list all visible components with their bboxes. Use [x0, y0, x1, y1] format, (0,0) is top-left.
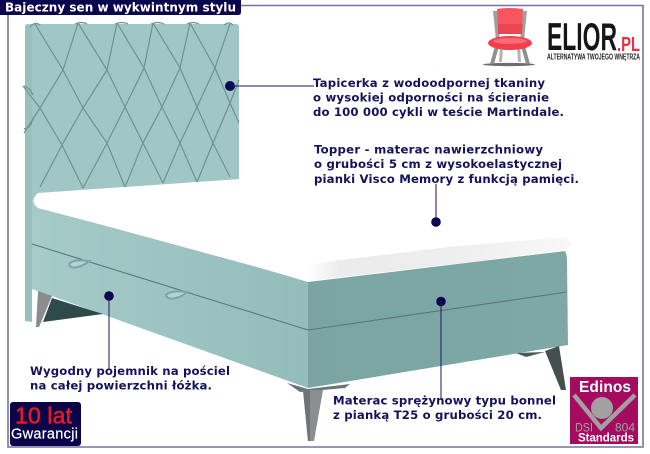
title bar: Bajeczny sen w wykwintnym stylu [5, 0, 236, 14]
logo wordmark: .PL [617, 34, 640, 56]
badge: Edinos standards: Standards [578, 432, 634, 444]
badge: Edinos standards [570, 377, 638, 444]
headboard [23, 22, 239, 322]
callout: upholstery: Tapicerka z wodoodpornej tkaniny [313, 76, 545, 90]
storage handles [69, 260, 187, 299]
box base [32, 200, 568, 388]
base seam [32, 244, 567, 330]
badge: 10 lat warranty: Gwarancji [11, 426, 78, 442]
front centre leg [287, 383, 350, 441]
callout: mattress [333, 297, 556, 422]
badge: 10 lat warranty [10, 402, 81, 446]
callout: upholstery: o wysokiej odporności na ścieranie [313, 90, 549, 104]
badge: Edinos standards: DSI [575, 420, 593, 434]
badge: Edinos standards: 804 [615, 420, 635, 434]
topper mattress [34, 179, 572, 281]
front right leg [516, 346, 566, 390]
callout: storage: Wygodny pojemnik na pościel [30, 364, 230, 378]
callout: storage [30, 291, 230, 392]
icon: red chair [483, 8, 535, 66]
callout: mattress: Materac sprężynowy typu bonnel [333, 394, 556, 408]
callout: topper: Topper - materac nawierzchniowy [314, 142, 543, 156]
callout: upholstery: do 100 000 cykli w teście Martindale. [313, 105, 564, 119]
callout: upholstery [225, 76, 564, 119]
callout: topper: pianki Visco Memory z funkcją pamięci. [314, 172, 579, 186]
logo: Elior.pl [483, 8, 640, 66]
callout: storage: na całej powierzchni łóżka. [30, 378, 212, 392]
badge: Edinos standards: Edinos [579, 379, 631, 396]
callout: topper: o grubości 5 cm z wysokoelastycznej [314, 157, 562, 171]
callout: mattress: z pianką T25 o grubości 20 cm. [333, 408, 542, 422]
callout: topper [314, 142, 579, 227]
headboard diamond stitching [23, 22, 239, 188]
badge: 10 lat warranty: 10 lat [15, 402, 73, 428]
bed illustration [23, 22, 572, 441]
back left leg [36, 291, 103, 327]
